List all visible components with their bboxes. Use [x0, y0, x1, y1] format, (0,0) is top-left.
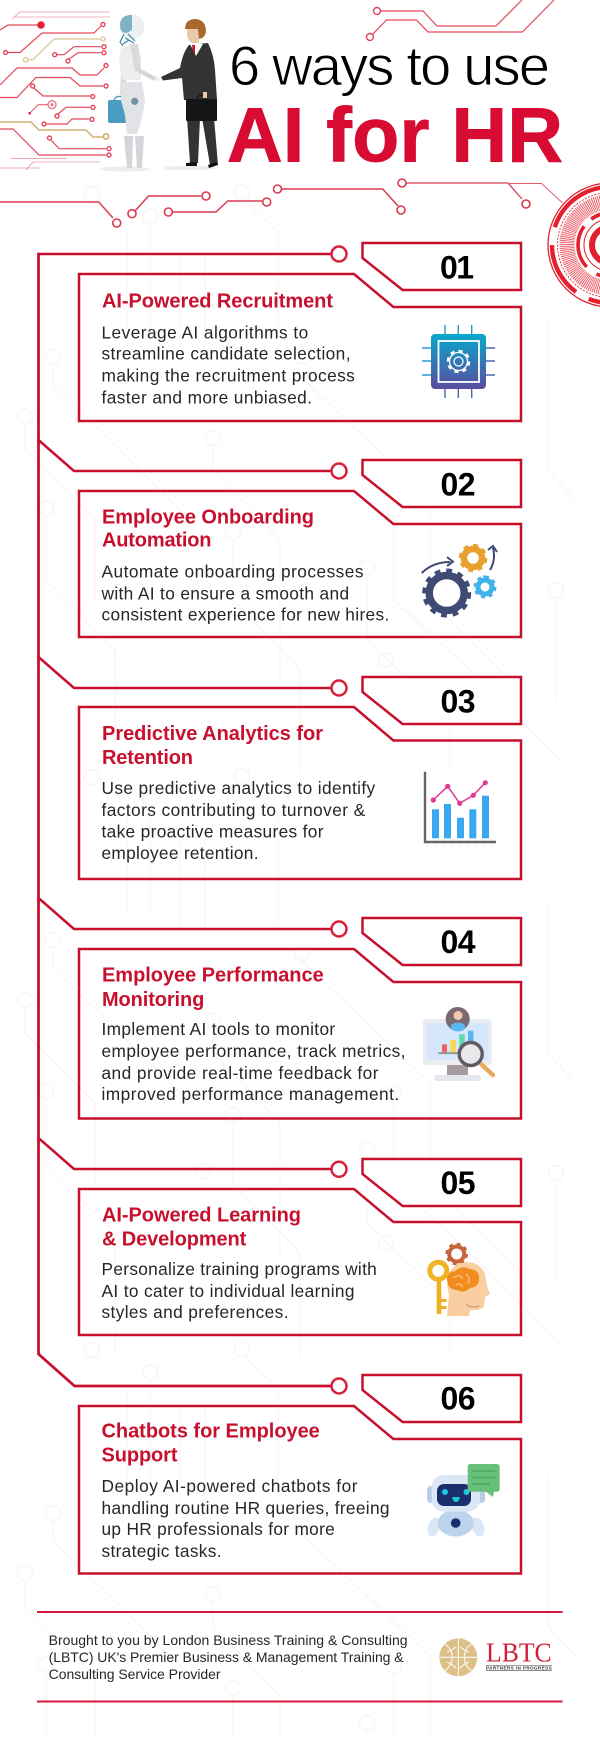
- card heading: [102, 1421, 320, 1467]
- step 06: [79, 1375, 521, 1574]
- card text: [102, 1019, 406, 1104]
- card text: strategic tasks.: [102, 1541, 222, 1561]
- footer text: Brought to you by London Business Training & Consulting: [49, 1632, 408, 1648]
- number tag 01: 01: [440, 250, 474, 286]
- header circuit traces: [0, 0, 563, 227]
- card heading: Support: [102, 1445, 178, 1467]
- card text: Automate onboarding processes: [102, 561, 364, 581]
- icon: monitor with magnifier: [423, 1007, 493, 1081]
- number tag 03: [362, 677, 521, 724]
- card text: Deploy AI-powered chatbots for: [102, 1476, 358, 1496]
- card: [79, 1189, 521, 1335]
- card heading: [102, 1205, 301, 1251]
- card heading: AI-Powered Recruitment: [102, 290, 333, 312]
- card: [79, 274, 521, 421]
- card heading: Employee Performance: [102, 965, 324, 987]
- card text: styles and preferences.: [102, 1302, 288, 1322]
- card text: and provide real-time feedback for: [102, 1063, 379, 1083]
- card text: Personalize training programs with: [102, 1259, 377, 1279]
- card: [79, 949, 521, 1118]
- card text: [102, 1476, 390, 1561]
- icon: head with brain and key: [430, 1244, 490, 1316]
- number tag 03: 03: [440, 684, 476, 720]
- logo: LBTC: PARTNERS IN PROGRESS: [486, 1666, 552, 1671]
- card text: making the recruitment process: [102, 366, 355, 386]
- step 01: [79, 243, 521, 421]
- number tag 05: 05: [440, 1165, 476, 1201]
- footer text: Consulting Service Provider: [49, 1666, 221, 1682]
- card text: factors contributing to turnover &: [102, 800, 366, 820]
- card: [79, 1406, 521, 1574]
- number tag 04: [362, 918, 521, 965]
- card heading: Predictive Analytics for: [102, 723, 323, 745]
- title: AI for HR: [227, 92, 563, 178]
- card text: employee performance, track metrics,: [102, 1041, 406, 1061]
- step 04: [79, 918, 521, 1118]
- icon: gears with arrows: [422, 546, 497, 615]
- number tag 05: [362, 1159, 521, 1206]
- card heading: [102, 723, 323, 769]
- connector node: [332, 680, 346, 696]
- number tag 02: 02: [440, 466, 476, 502]
- number tag 02: [362, 460, 521, 507]
- logo: LBTC: LBTC: [486, 1638, 552, 1668]
- card heading: AI-Powered Learning: [102, 1205, 301, 1227]
- number tag 06: [362, 1375, 521, 1422]
- footer text: (LBTC) UK's Premier Business & Management Training &: [49, 1649, 404, 1665]
- card text: take proactive measures for: [102, 821, 324, 841]
- connector node: [332, 246, 346, 262]
- connector node: [332, 922, 346, 936]
- icon: AI chip with gear: [422, 325, 495, 398]
- card text: Leverage AI algorithms to: [102, 322, 308, 342]
- timeline connector: [38, 253, 331, 1386]
- card heading: Chatbots for Employee: [102, 1421, 320, 1443]
- card text: Use predictive analytics to identify: [102, 778, 376, 798]
- footer text: [49, 1632, 408, 1682]
- connector node: [332, 1378, 346, 1394]
- card heading: Monitoring: [102, 989, 204, 1011]
- header circuit traces left: [0, 12, 111, 170]
- card text: [102, 778, 376, 863]
- card heading: & Development: [102, 1229, 247, 1251]
- card text: up HR professionals for more: [102, 1519, 335, 1539]
- card heading: Retention: [102, 747, 193, 769]
- card text: employee retention.: [102, 843, 258, 863]
- connector node: [332, 1162, 346, 1177]
- card text: [100, 561, 389, 625]
- card heading: Automation: [102, 530, 212, 552]
- card heading: Employee Onboarding: [102, 506, 314, 528]
- card heading: [102, 506, 314, 552]
- card text: faster and more unbiased.: [102, 387, 312, 407]
- card text: AI to cater to individual learning: [102, 1281, 354, 1301]
- robot: [100, 14, 160, 172]
- card text: handling routine HR queries, freeing: [102, 1498, 390, 1518]
- number tag 01: [362, 243, 521, 290]
- connector node: [332, 464, 346, 478]
- step 02: [79, 460, 521, 637]
- businessman: [161, 19, 218, 170]
- icon: chatbot with speech bubble: [425, 1464, 500, 1538]
- illustration: robot shaking hands with businessman: [100, 14, 218, 172]
- card text: Implement AI tools to monitor: [102, 1019, 335, 1039]
- card text: improved performance management.: [102, 1084, 399, 1104]
- card text: consistent experience for new hires.: [102, 605, 389, 625]
- logo: LBTC: [439, 1638, 552, 1677]
- decorative red radial circle: [548, 183, 600, 307]
- card: [79, 491, 521, 637]
- step 05: [79, 1159, 521, 1335]
- number tag 06: 06: [440, 1380, 476, 1416]
- card: [79, 707, 521, 879]
- step 03: [79, 677, 521, 879]
- footer: [37, 1612, 562, 1702]
- number tag 04: 04: [440, 924, 476, 960]
- title: [227, 34, 563, 178]
- card text: [102, 1259, 377, 1322]
- card text: [102, 322, 355, 407]
- card heading: [102, 965, 324, 1011]
- card text: with AI to ensure a smooth and: [100, 583, 349, 603]
- icon: bar and line chart: [421, 772, 496, 846]
- title: 6 ways to use: [229, 34, 550, 97]
- card text: streamline candidate selection,: [102, 344, 350, 364]
